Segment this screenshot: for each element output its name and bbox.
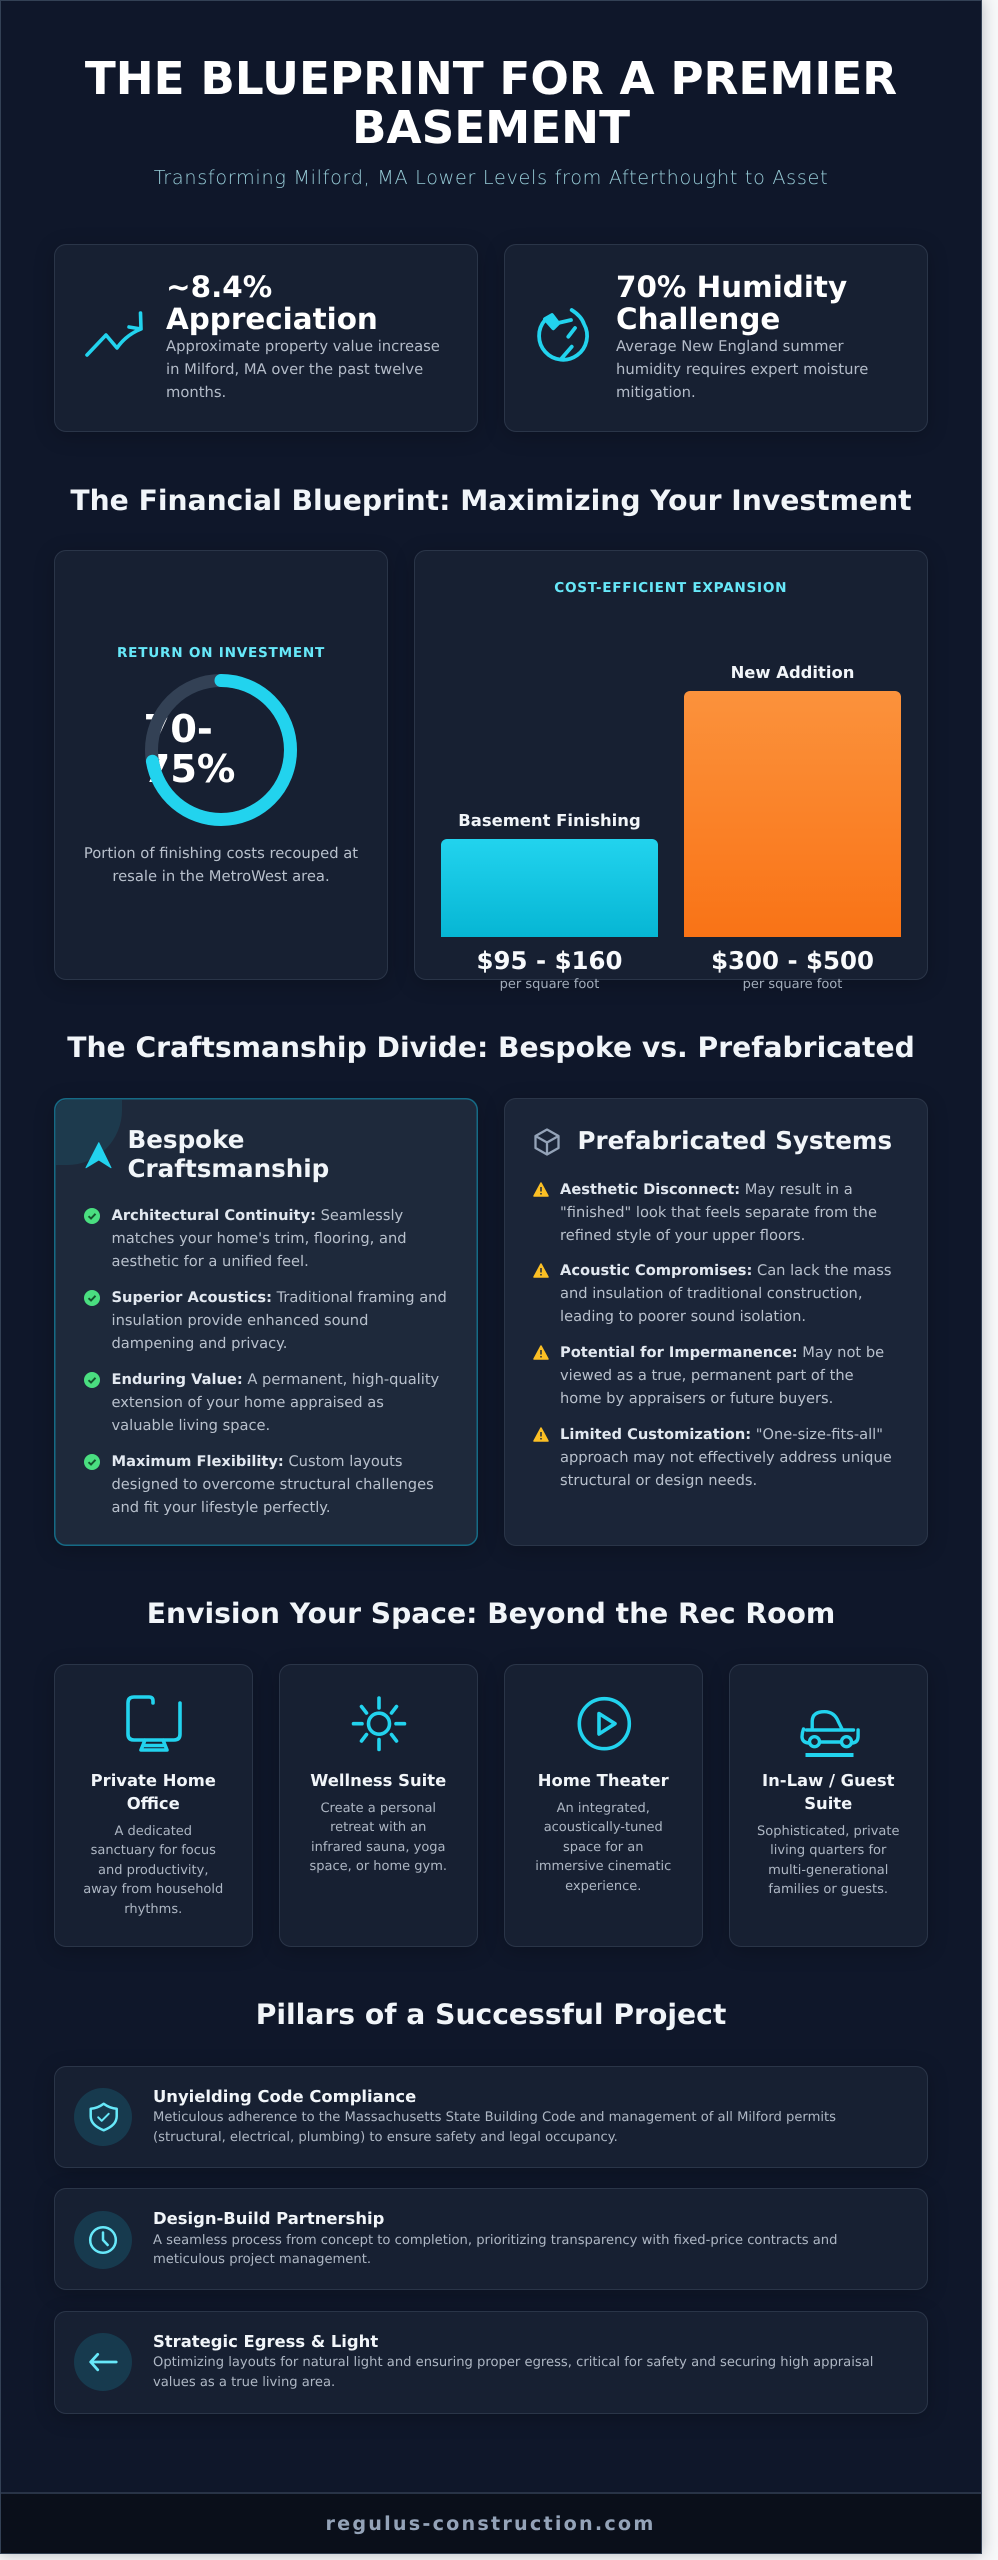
card description <box>83 1824 223 1917</box>
panel: wellness suite <box>279 1664 478 1947</box>
stat heading: Challenge <box>616 302 780 336</box>
card description: sanctuary for focus <box>91 1843 216 1858</box>
benefit: superior acoustics: insulation provide enhanced sound <box>112 1312 368 1329</box>
ROI description: Portion of finishing costs recouped at <box>84 844 358 862</box>
icon: shield check <box>74 2088 132 2146</box>
panel heading: Bespoke <box>128 1124 244 1154</box>
benefit: enduring value: valuable living space. <box>112 1417 270 1434</box>
icon: warning <box>533 1182 549 1197</box>
card description: space, or home gym. <box>309 1859 447 1874</box>
list of benefits <box>84 1207 447 1516</box>
benefit: maximum flexibility <box>112 1453 434 1516</box>
icon: warning <box>533 1427 549 1442</box>
icon: warning <box>533 1263 549 1278</box>
drawback: potential for impermanence: viewed as a true, permanent part of the <box>560 1367 854 1384</box>
title: BASEMENT <box>352 101 630 154</box>
card description: families or guests. <box>768 1882 888 1897</box>
footer website: regulus-construction.com <box>325 2512 656 2535</box>
panel: appreciation stat <box>54 244 478 432</box>
subtitle: Transforming Milford, MA Lower Levels from Afterthought to Asset <box>154 166 828 189</box>
icon: play button <box>578 1696 632 1750</box>
pillar title: Strategic Egress & Light <box>153 2332 378 2350</box>
stat description: in Milford, MA over the past twelve <box>166 361 423 378</box>
panel: return on investment <box>54 550 388 980</box>
drawback: potential for impermanence <box>560 1344 884 1407</box>
unit: new addition: per square foot <box>743 977 842 992</box>
card description: An integrated, <box>557 1801 650 1816</box>
pillar description: Meticulous adherence to the Massachusetts State Building Code and management of all Milford permits <box>153 2110 836 2125</box>
card description: away from household <box>83 1882 223 1897</box>
benefit: enduring value <box>112 1371 439 1434</box>
card description <box>309 1801 447 1874</box>
stat description: mitigation. <box>616 384 696 401</box>
footer <box>1 2492 981 2553</box>
ROI description: resale in the MetroWest area. <box>112 868 330 884</box>
benefit: architectural continuity <box>112 1207 407 1270</box>
panel: design-build partnership <box>54 2188 928 2290</box>
icon: left arrow <box>74 2333 132 2391</box>
pillar title: Design-Build Partnership <box>153 2209 384 2228</box>
benefit: architectural continuity: Architectural Continuity: Seamlessly <box>112 1207 403 1224</box>
card description: infrared sauna, yoga <box>311 1840 446 1855</box>
corner glow accent <box>56 1100 122 1164</box>
benefit: superior acoustics: Superior Acoustics: Traditional framing and <box>112 1289 447 1306</box>
bar: basement finishing <box>441 839 658 937</box>
card description: rhythms. <box>124 1902 182 1917</box>
panel heading: Prefabricated Systems <box>578 1126 892 1155</box>
stat heading <box>616 270 847 336</box>
pillar description: A seamless process from concept to completion, prioritizing transparency with fixed-price contracts and <box>153 2232 837 2248</box>
drawback: acoustic compromises: leading to poorer sound isolation. <box>560 1308 806 1325</box>
benefit: enduring value: Enduring Value: A permanent, high-quality <box>112 1371 439 1388</box>
bar label: new addition: New Addition <box>731 663 854 682</box>
pillar title: Unyielding Code Compliance <box>153 2086 416 2106</box>
heading: envision your space: Envision Your Space: Beyond the Rec Room <box>147 1597 835 1630</box>
icon: clock <box>74 2211 132 2269</box>
drawback: acoustic compromises <box>560 1262 891 1325</box>
unit: basement finishing: per square foot <box>500 977 599 992</box>
benefit: maximum flexibility: designed to overcome structural challenges <box>112 1476 434 1493</box>
donut chart <box>145 674 297 826</box>
drawback: aesthetic disconnect <box>560 1180 877 1244</box>
benefit: superior acoustics <box>112 1289 447 1352</box>
bar: new addition <box>684 691 901 937</box>
pillar description <box>153 2108 836 2147</box>
drawback: acoustic compromises: Acoustic Compromises: Can lack the mass <box>560 1262 891 1279</box>
pillar description: Optimizing layouts for natural light and ensuring proper egress, critical for safety and securing high appraisal <box>153 2355 873 2370</box>
card description: experience. <box>565 1879 641 1894</box>
ROI description <box>84 844 358 884</box>
panel: in-law guest suite <box>729 1664 928 1947</box>
drawback: aesthetic disconnect: "finished" look that feels separate from the <box>560 1204 877 1221</box>
card description: immersive cinematic <box>535 1859 671 1874</box>
panel: cost comparison bar chart <box>414 550 928 980</box>
pillar description <box>153 2353 873 2392</box>
icon: broken globe <box>537 308 589 362</box>
pillar description: (structural, electrical, plumbing) to ensure safety and legal occupancy. <box>153 2130 618 2145</box>
panel heading <box>128 1124 329 1183</box>
stat description <box>166 338 440 401</box>
card title <box>91 1771 216 1812</box>
pillar description <box>153 2230 837 2270</box>
benefit: architectural continuity: aesthetic for a unified feel. <box>112 1253 309 1270</box>
drawback: potential for impermanence: Potential for Impermanence: May not be <box>560 1344 884 1361</box>
drawback: aesthetic disconnect: refined style of your upper floors. <box>560 1227 805 1244</box>
card description: multi-generational <box>768 1863 888 1878</box>
heading: pillars: Pillars of a Successful Project <box>256 1998 726 2031</box>
ROI label: RETURN ON INVESTMENT <box>117 645 325 661</box>
panel: strategic egress and light <box>54 2310 928 2414</box>
panel: humidity stat <box>504 244 928 432</box>
panel: private home office <box>54 1664 252 1947</box>
ROI value <box>144 707 235 792</box>
ROI value: 75% <box>144 747 235 792</box>
icon: monitor <box>126 1695 182 1752</box>
stat heading: Appreciation <box>166 302 378 336</box>
card title: In-Law / Guest <box>762 1771 894 1790</box>
drawback: potential for impermanence: home by appraisers or future buyers. <box>560 1390 833 1407</box>
card description <box>535 1801 671 1894</box>
card title: Home Theater <box>538 1771 669 1790</box>
title: THE BLUEPRINT FOR A PREMIER <box>85 52 897 105</box>
pillar description: values as a true living area. <box>153 2375 335 2390</box>
card title: Wellness Suite <box>310 1771 446 1790</box>
drawback: acoustic compromises: and insulation of traditional construction, <box>560 1285 862 1302</box>
panel: bespoke craftsmanship <box>54 1098 478 1546</box>
icon: trending up arrow <box>85 311 143 357</box>
icon: navigation arrow <box>86 1142 112 1168</box>
heading: financial blueprint: The Financial Blueprint: Maximizing Your Investment <box>70 484 912 517</box>
card description: living quarters for <box>770 1843 886 1858</box>
card description: acoustically-tuned <box>544 1820 663 1835</box>
icon: check <box>84 1208 100 1224</box>
card title <box>762 1771 894 1812</box>
card description: Sophisticated, private <box>757 1824 899 1839</box>
icon: warning <box>533 1345 549 1360</box>
icon: check <box>84 1454 100 1470</box>
card title: Suite <box>804 1794 852 1812</box>
icon: sun <box>352 1696 406 1752</box>
panel heading: Craftsmanship <box>128 1154 329 1183</box>
benefit: enduring value: extension of your home appraised as <box>112 1394 384 1411</box>
heading: craftsmanship divide: The Craftsmanship Divide: Bespoke vs. Prefabricated <box>67 1031 915 1064</box>
card description: and productivity, <box>98 1863 208 1878</box>
stat description: humidity requires expert moisture <box>616 361 868 378</box>
icon: check <box>84 1290 100 1306</box>
panel: home theater <box>504 1664 702 1947</box>
card description <box>729 1822 928 1900</box>
stat heading <box>166 270 378 336</box>
pillar description: meticulous project management. <box>153 2252 371 2267</box>
icon: check <box>84 1372 100 1388</box>
benefit: superior acoustics: dampening and privacy. <box>112 1335 287 1352</box>
list of drawbacks <box>533 1180 892 1489</box>
drawback: aesthetic disconnect: Aesthetic Disconnect: May result in a <box>560 1180 853 1198</box>
card title: Office <box>127 1794 180 1812</box>
stat description <box>616 338 868 401</box>
price: basement finishing: $95 - $160 <box>477 946 622 975</box>
price: new addition: $300 - $500 <box>711 946 874 975</box>
stat description: Average New England summer <box>616 338 844 355</box>
chart label: COST-EFFICIENT EXPANSION <box>554 580 787 596</box>
title <box>85 52 897 154</box>
icon: cube <box>534 1128 560 1156</box>
benefit: maximum flexibility: Maximum Flexibility: Custom layouts <box>112 1453 403 1470</box>
panel: prefabricated systems <box>504 1098 928 1546</box>
panel: code compliance <box>54 2066 928 2168</box>
benefit: maximum flexibility: and fit your lifestyle perfectly. <box>112 1499 331 1516</box>
card description: space for an <box>563 1840 643 1855</box>
ROI value: 70- <box>144 707 213 752</box>
drawback: limited customization: structural or design needs. <box>560 1472 757 1489</box>
card title: Private Home <box>91 1771 216 1790</box>
drawback: limited customization: approach may not effectively address unique <box>560 1449 892 1466</box>
drawback: limited customization <box>560 1426 892 1489</box>
card description: Create a personal <box>320 1801 436 1816</box>
stat heading: ~8.4% <box>166 270 272 304</box>
card description: A dedicated <box>114 1824 192 1839</box>
stat description: Approximate property value increase <box>166 338 440 355</box>
stat description: months. <box>166 384 226 401</box>
benefit: architectural continuity: matches your home's trim, flooring, and <box>112 1230 407 1247</box>
card description: retreat with an <box>330 1820 426 1835</box>
drawback: limited customization: Limited Customization: "One-size-fits-all" <box>560 1426 883 1442</box>
icon: car <box>800 1710 860 1757</box>
stat heading: 70% Humidity <box>616 270 847 304</box>
bar label: basement finishing: Basement Finishing <box>458 810 641 830</box>
